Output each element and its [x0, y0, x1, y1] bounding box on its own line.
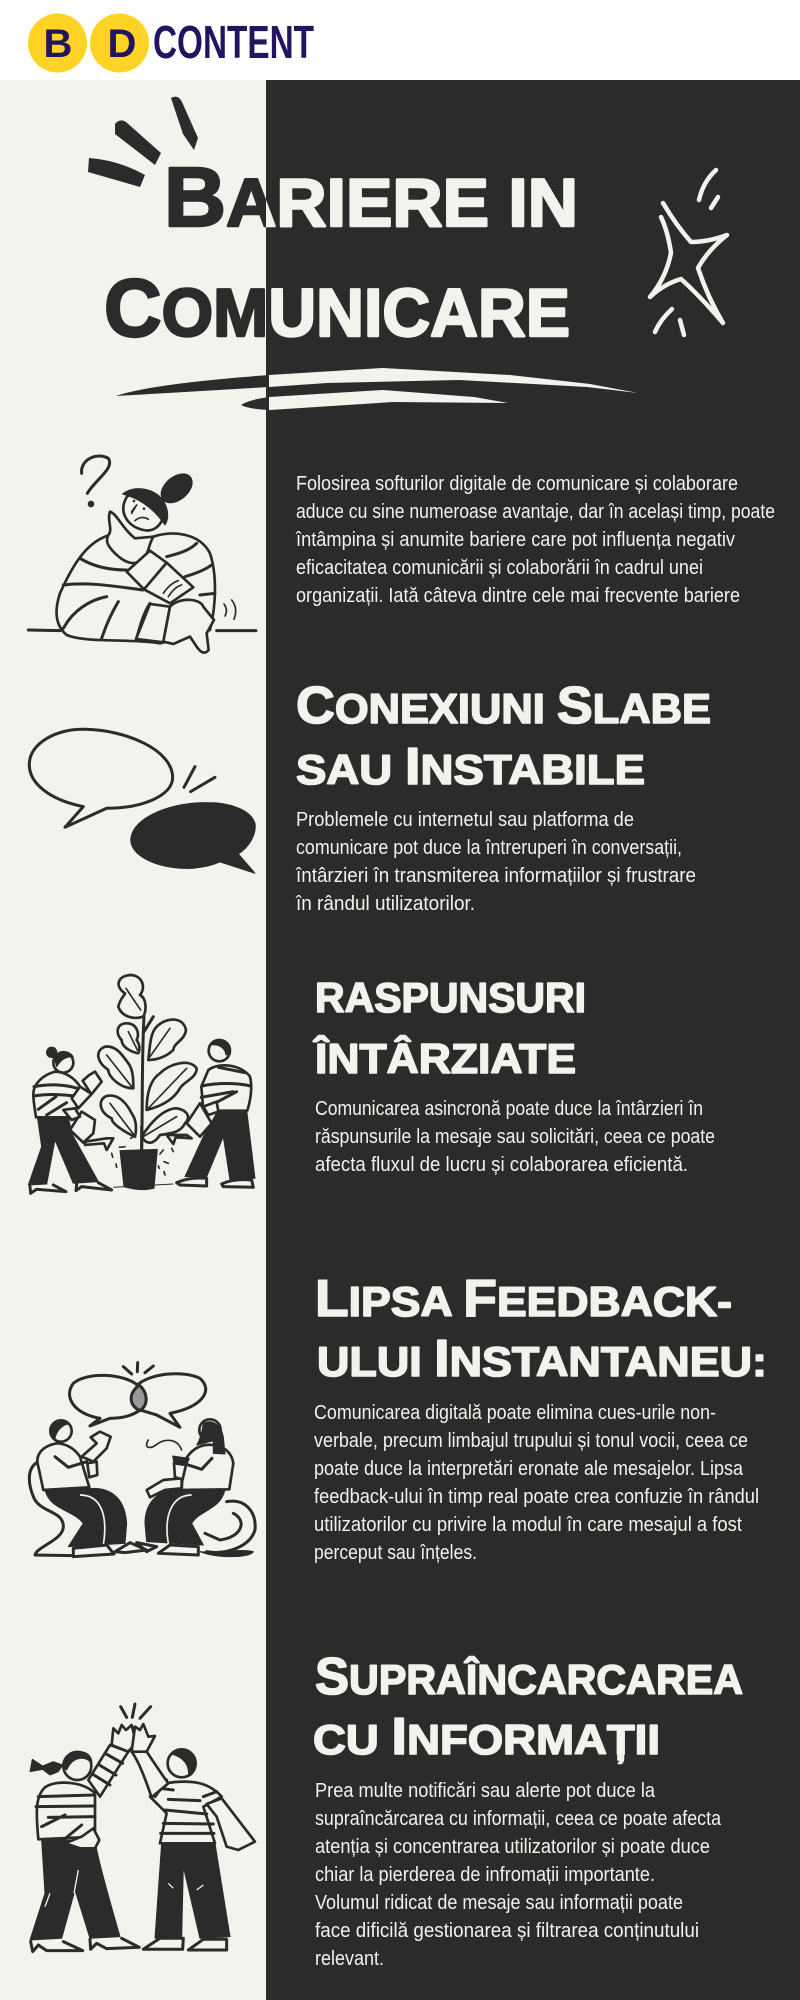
section text: Supraîncarcarea cu Informații: atenția și concentrarea utilizatorilor și poate duce: [315, 1836, 710, 1858]
section heading: Conexiuni Slabe: [296, 677, 711, 796]
section text: Lipsa Feedback-ului Instantaneu: utilizatorilor cu privire la modul în care mesajul a fost: [314, 1514, 742, 1536]
section text: Conexiuni Slabe: Problemele cu internetul sau platforma de: [296, 809, 634, 831]
burst above hands: [121, 1704, 151, 1718]
question mark: [82, 456, 110, 507]
left light panel: [0, 80, 266, 2000]
section text: Lipsa Feedback-ului Instantaneu: Comunicarea digitală poate elimina cues-urile non-: [314, 1402, 716, 1424]
section heading: Supraîncarcarea cu Informații: CU INFORMAȚII: [313, 1708, 660, 1766]
man with watering can: [167, 1040, 255, 1187]
man on chair: [29, 1420, 147, 1557]
section heading: Raspunsuri Întârziate: ÎNTÂRZIATE: [313, 1034, 576, 1082]
section text: Supraîncarcarea cu Informații: Prea multe notificări sau alerte pot duce la: [315, 1780, 656, 1802]
bun and head: [123, 467, 198, 531]
section heading: Conexiuni Slabe: CONEXIUNI SLABE: [296, 677, 711, 735]
title: COMUNICARE: [104, 263, 570, 354]
section text: Lipsa Feedback-ului Instantaneu: feedback-ului în timp real poate crea confuzie în rândul: [314, 1486, 759, 1508]
section text: Conexiuni Slabe: comunicare pot duce la întreruperi în conversații,: [296, 837, 682, 859]
intro text: Folosirea softurilor digitale de comunicare și colaborare: [296, 473, 738, 495]
logo: BD Content: B: [44, 22, 72, 66]
section text: Raspunsuri Întârziate: Comunicarea asincronă poate duce la întârzieri în: [315, 1098, 703, 1120]
sweater body: [57, 534, 215, 643]
woman with watering can: [28, 1047, 113, 1193]
table line: [28, 625, 256, 635]
plant: [98, 975, 197, 1150]
title: [104, 150, 578, 354]
woman on pouf: [137, 1419, 255, 1557]
section heading: Lipsa Feedback-ului Instantaneu: [315, 1270, 767, 1388]
section text: Lipsa Feedback-ului Instantaneu: [314, 1402, 759, 1564]
section text: Conexiuni Slabe: în rândul utilizatorilor.: [295, 893, 475, 915]
section text: Supraîncarcarea cu Informații: [315, 1780, 722, 1970]
brush stroke under title: [116, 368, 638, 410]
section text: Supraîncarcarea cu Informații: relevant.: [315, 1948, 384, 1970]
intro text: eficacitatea comunicării și colaborării în cadrul unei: [296, 557, 703, 579]
section text: Raspunsuri Întârziate: [315, 1098, 715, 1176]
section heading: Supraîncarcarea cu Informații: SUPRAÎNCARCAREA: [315, 1648, 743, 1706]
section text: Conexiuni Slabe: întârzieri în transmiterea informațiilor și frustrare: [295, 865, 696, 887]
section text: Raspunsuri Întârziate: afecta fluxul de lucru și colaborarea eficientă.: [315, 1154, 688, 1176]
woman: [30, 1725, 139, 1952]
overlapping speech bubbles: [70, 1363, 206, 1427]
illustration: two people watering a plant: [28, 975, 255, 1193]
intro text: organizații. Iată câteva dintre cele mai frecvente bariere: [296, 585, 740, 607]
logo: BD Content: [28, 14, 314, 72]
section heading: Lipsa Feedback-ului Instantaneu: LIPSA FEEDBACK-: [315, 1270, 732, 1328]
right dark panel: [266, 80, 800, 2000]
illustration: two people high five: [30, 1704, 255, 1952]
section text: Supraîncarcarea cu Informații: Volumul ridicat de mesaje sau informații poate: [315, 1892, 683, 1914]
section heading: Raspunsuri Întârziate: [313, 974, 586, 1082]
section heading: Lipsa Feedback-ului Instantaneu: ULUI INSTANTANEU:: [317, 1330, 767, 1388]
illustration: speech bubbles: [29, 729, 255, 873]
illustration: thinking person: [28, 456, 256, 653]
logo: BD Content: CONTENT: [153, 16, 314, 68]
arm and hands: [107, 512, 236, 653]
section heading: Conexiuni Slabe: SAU INSTABILE: [296, 738, 645, 796]
illustration: two people talking: [29, 1363, 255, 1557]
intro text: întâmpina și anumite bariere care pot influența negativ: [295, 529, 735, 551]
header bar: [0, 0, 800, 80]
section heading: Raspunsuri Întârziate: RASPUNSURI: [315, 974, 586, 1021]
man: [132, 1724, 255, 1950]
intro text: [295, 473, 775, 607]
section text: Lipsa Feedback-ului Instantaneu: poate duce la interpretări eronate ale mesajelor. Lipsa: [314, 1458, 744, 1480]
icon: hand-drawn star with sparks: [650, 170, 727, 335]
water droplets: [112, 1137, 173, 1175]
section text: Supraîncarcarea cu Informații: chiar la pierderea de infromații importante.: [315, 1864, 655, 1886]
section text: Supraîncarcarea cu Informații: supraîncărcarea cu informații, ceea ce poate afecta: [315, 1808, 722, 1830]
section text: Lipsa Feedback-ului Instantaneu: perceput sau înțeles.: [314, 1542, 477, 1564]
title: BARIERE IN: [164, 150, 578, 244]
icon: burst rays top left of title: [88, 97, 198, 187]
section text: Conexiuni Slabe: [295, 809, 696, 915]
section text: Raspunsuri Întârziate: răspunsurile la mesaje sau solicitări, ceea ce poate: [315, 1126, 715, 1148]
section heading: Supraîncarcarea cu Informații: [313, 1648, 743, 1766]
pot: [113, 1149, 173, 1190]
section text: Supraîncarcarea cu Informații: face dificilă gestionarea și filtrarea conținutului: [315, 1920, 699, 1942]
logo: BD Content: D: [108, 22, 136, 66]
section text: Lipsa Feedback-ului Instantaneu: verbale, precum limbajul trupului și tonul vocii, ceea ce: [314, 1430, 748, 1452]
